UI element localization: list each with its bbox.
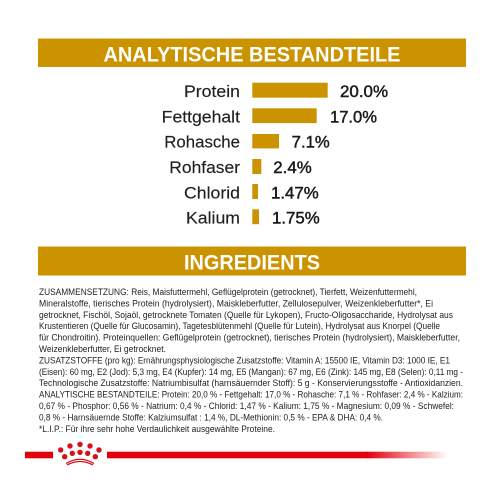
row: Protein: 20.0% — [340, 83, 388, 101]
row: Rohfaser: Rohfaser — [169, 159, 241, 177]
row: Chlorid: 1.47% — [271, 184, 319, 202]
text block: ingredients list: für Chondroitin). Proteinquellen: Geflügelprotein (getrocknet), tierisches Protein (hydrolysiert), Maiskleberfutter, — [39, 333, 460, 344]
panel: ingredients heading: INGREDIENTS — [184, 252, 320, 275]
bar chart: analytical constituents — [162, 83, 388, 228]
row: Kalium — [186, 209, 320, 228]
text block: ingredients list — [39, 287, 463, 435]
row: Protein — [184, 83, 388, 101]
panel: analytical constituents heading: ANALYTISCHE BESTANDTEILE — [104, 44, 400, 66]
row: Rohasche: 7.1% — [292, 134, 330, 152]
panel: analytical constituents heading — [38, 38, 466, 67]
row: Fettgehalt — [162, 108, 377, 126]
row: Chlorid — [184, 184, 319, 202]
text block: ingredients list: Krustentieren (Quelle für Glucosamin), Tagetesblütenmehl (Quelle für Lutein), Hydrolysat aus Knorpel (Quelle — [39, 321, 440, 332]
row: Chlorid: Chlorid — [184, 184, 240, 202]
row: Rohasche: Rohasche — [164, 134, 240, 152]
text block: ingredients list: Mineralstoffe, tierisches Protein (hydrolysiert), Maiskleberfutter, Zellulosepulver, Weizenkleberfutter*, Ei — [39, 298, 433, 309]
row: Rohasche — [164, 134, 330, 152]
row: Rohfaser — [169, 159, 312, 177]
row: Kalium: Kalium — [186, 210, 240, 228]
row: Rohfaser: 2.4% — [273, 159, 312, 177]
footer: red rule with fade — [25, 452, 448, 458]
row: Kalium: 1.75% — [272, 210, 320, 228]
text block: ingredients list: ZUSAMMENSETZUNG: Reis, Maisfuttermehl, Geflügelprotein (getrocknet), Tierfett, Weizenfuttermehl, — [39, 287, 417, 298]
row: Protein: Protein — [184, 83, 240, 101]
text block: ingredients list: *L.I.P.: Für ihre sehr hohe Verdaulichkeit ausgewählte Proteine. — [39, 424, 275, 435]
text block: ingredients list: Technologische Zusatzstoffe: Natriumbisulfat (harnsäuernder Stoff): 5 g - Konservierungsstoffe - Antioxidanzien. — [39, 378, 463, 389]
panel: ingredients heading — [38, 246, 466, 276]
text block: ingredients list: 0,8 % - Harnsäuernde Stoffe: Kalziumsulfat : 1,4 %, DL-Methionin: 0,5 % - EPA & DHA: 0,4 %. — [39, 412, 383, 423]
icon: Royal Canin crown — [58, 442, 102, 465]
text block: ingredients list: Weizenkleberfutter, Ei getrocknet. — [39, 344, 166, 355]
row: Fettgehalt: 17.0% — [330, 108, 377, 126]
text block: ingredients list: getrocknet, Fischöl, Sojaöl, getrocknete Tomaten (Quelle für Lykopen), Fructo-Oligosaccharide, Hydrolysat aus — [39, 310, 453, 321]
row: Fettgehalt: Fettgehalt — [162, 108, 240, 126]
